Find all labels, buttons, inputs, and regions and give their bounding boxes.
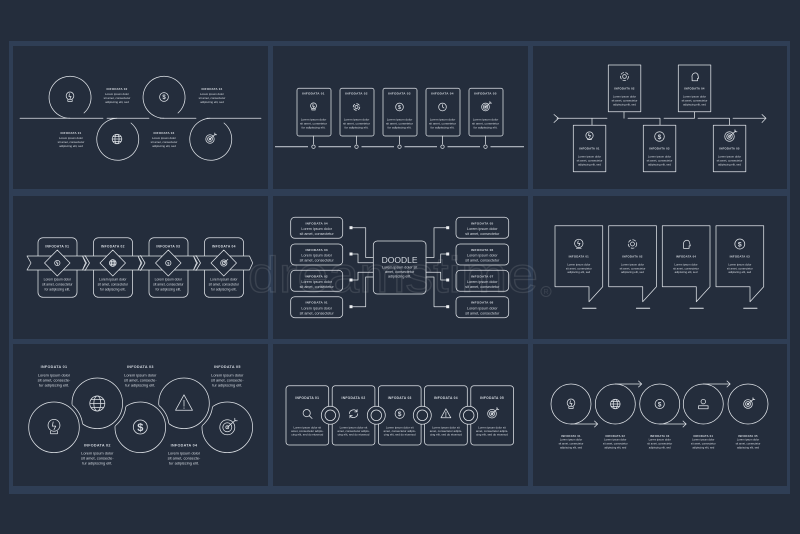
- bubble labels: sit amet, consectetur: [673, 266, 699, 270]
- side box labels: Lorem ipsum dolor: [301, 280, 333, 284]
- diamond icons: $: [167, 261, 170, 265]
- side box labels: Lorem ipsum dolor: [301, 306, 333, 310]
- rounded cards: [38, 238, 244, 297]
- ribbon labels: for adipiscing elit,: [45, 288, 70, 292]
- panel: ribbon and diamonds: [27, 238, 253, 297]
- linked card labels: INFODATA 02: [342, 396, 365, 400]
- spiral labels: adipiscing elit, sed: [200, 100, 224, 104]
- card labels: sit amet, consetetur: [386, 122, 413, 126]
- spiral labels: sit amet, consectetur: [104, 96, 130, 100]
- side box labels: sit amet, consectetur: [300, 232, 334, 236]
- bubble labels: adipiscing elit, sed: [567, 270, 591, 274]
- ring labels: INFODATA 01: [41, 365, 67, 369]
- circle labels: adipiscing elit, sed: [604, 446, 627, 450]
- box labels: sit amet, consectetur: [682, 98, 707, 102]
- bubble labels: adipiscing elit, sed: [728, 270, 752, 274]
- card labels: for adipiscing elit.: [345, 126, 369, 130]
- spiral labels: INFODATA 03: [154, 131, 175, 135]
- spiral labels: INFODATA 01: [61, 131, 82, 135]
- card labels: INFODATA 05: [474, 92, 497, 96]
- side box labels: INFODATA 07: [471, 274, 494, 278]
- spiral labels: Lorem ipsum dolor: [105, 92, 129, 96]
- ribbon labels: sit amet, consectetur: [42, 282, 73, 286]
- ring labels: sit amet, consecte-: [211, 378, 244, 382]
- bubbles: [555, 226, 764, 308]
- spiral icons: [66, 92, 217, 144]
- arrow line with chevrons: [554, 112, 766, 125]
- linked card labels: [291, 396, 508, 437]
- card labels: [300, 92, 499, 130]
- ribbon labels: Lorem ipsum dolor: [210, 278, 238, 282]
- ring labels: Lorem ipsum dolor: [124, 372, 157, 378]
- ring labels: Lorem ipsum dolor: [168, 450, 201, 456]
- circle labels: sit amet, consectetur: [647, 442, 672, 446]
- linked card labels: Lorem ipsum dolor sit: [432, 426, 460, 430]
- linked card labels: Lorem ipsum dolor sit: [478, 426, 506, 430]
- circle icons: [567, 398, 755, 409]
- ring icons: $: [137, 422, 143, 434]
- side box labels: Lorem ipsum dolor: [467, 254, 498, 258]
- card labels: INFODATA 01: [302, 92, 325, 96]
- ring labels: tur adipiscing elit.: [125, 382, 155, 388]
- circle labels: [559, 434, 761, 450]
- ribbon labels: INFODATA 04: [212, 244, 236, 248]
- box labels: INFODATA 05: [719, 146, 740, 150]
- circle labels: adipiscing elit, sed: [737, 446, 759, 450]
- ring labels: Lorem ipsum dolor: [211, 372, 244, 378]
- side box labels: INFODATA 01: [305, 300, 328, 304]
- spiral icons: $: [162, 95, 166, 101]
- linked card labels: Lorem ipsum dolor sit: [386, 426, 414, 430]
- bubble labels: Lorem ipsum dolor: [728, 262, 751, 266]
- bubble labels: Lorem ipsum dolor: [567, 262, 590, 266]
- ring labels: INFODATA 05: [214, 365, 241, 369]
- side box labels: sit amet, consectetur: [465, 312, 500, 316]
- side box labels: sit amet, consectetur: [300, 285, 334, 289]
- panel backgrounds: [13, 46, 787, 486]
- panel: interlocking circles: [25, 365, 253, 466]
- circle labels: sit amet, consectetur: [691, 442, 716, 446]
- linked cards: [286, 386, 514, 445]
- ribbon labels: Lorem ipsum dolor: [99, 278, 127, 282]
- box labels: adipiscing elit, sed: [578, 162, 601, 166]
- side box labels: sit amet, consectetur: [300, 312, 334, 316]
- box labels: Lorem ipsum dolor: [613, 94, 636, 98]
- circle labels: sit amet, consectetur: [603, 442, 628, 446]
- card labels: sit amet, consetetur: [472, 122, 499, 126]
- cards and stems: [297, 88, 503, 148]
- side box labels: sit amet, consectetur: [465, 285, 500, 289]
- bubble labels: Lorem ipsum dolor: [621, 262, 644, 266]
- bubble labels: Lorem ipsum dolor: [674, 262, 698, 266]
- card labels: for adipiscing elit.: [431, 126, 455, 130]
- circle labels: sit amet, consectetur: [736, 442, 761, 446]
- spiral labels: adipiscing elit, sed: [105, 100, 129, 104]
- ring labels: sit amet, consecte-: [124, 378, 157, 382]
- hub text: adipiscing elit.: [388, 274, 411, 278]
- side box labels: Lorem ipsum dolor: [467, 280, 498, 284]
- side box labels: [300, 222, 500, 316]
- linked card labels: amet, consectetur adipis-: [337, 429, 370, 433]
- side boxes and hub: [291, 217, 509, 318]
- ribbon labels: Lorem ipsum dolor: [155, 278, 183, 282]
- circle labels: Lorem ipsum dolor: [737, 438, 759, 442]
- boxes: [573, 65, 746, 172]
- ribbon labels: for adipiscing elit,: [156, 288, 181, 292]
- ring labels: tur adipiscing elit.: [212, 382, 242, 388]
- ribbon labels: INFODATA 03: [156, 244, 180, 248]
- side box labels: Lorem ipsum dolor: [467, 227, 498, 231]
- ring labels: Lorem ipsum dolor: [38, 372, 71, 378]
- side box labels: sit amet, consectetur: [300, 258, 334, 262]
- side box labels: INFODATA 05: [471, 222, 494, 226]
- box labels: sit amet, consectetur: [647, 158, 672, 162]
- ribbon labels: sit amet, consectetur: [98, 282, 129, 286]
- side box labels: INFODATA 08: [471, 300, 494, 304]
- ribbon labels: INFODATA 01: [45, 244, 69, 248]
- linked card labels: amet, consectetur adipis-: [430, 429, 462, 433]
- linked card labels: amet, consectetur adipis-: [476, 429, 508, 433]
- card labels: for adipiscing elit.: [388, 126, 412, 130]
- circle labels: Lorem ipsum dolor: [649, 438, 671, 442]
- panel: five cards on a line: [275, 88, 524, 148]
- spiral line and arcs: [20, 76, 261, 160]
- linked card labels: amet, consectetur adipis-: [291, 429, 323, 433]
- card labels: Lorem ipsum dolor: [301, 118, 326, 122]
- watermark: R: [543, 289, 549, 296]
- panel: spiral circles timeline: [20, 76, 261, 160]
- bubble labels: INFODATA 03: [730, 254, 750, 258]
- linked card labels: INFODATA 03: [388, 396, 412, 400]
- box labels: sit amet, consectetur: [717, 158, 742, 162]
- connectors: [351, 228, 448, 307]
- bubble labels: INFODATA 01: [569, 254, 589, 258]
- ring labels: INFODATA 02: [84, 444, 111, 448]
- spiral labels: Lorem ipsum dolor: [59, 136, 83, 140]
- card labels: INFODATA 04: [431, 92, 454, 96]
- box labels: Lorem ipsum dolor: [578, 154, 601, 158]
- linked card icons: [303, 408, 499, 418]
- ribbon labels: sit amet, consectetur: [153, 282, 184, 286]
- bubble icons: [575, 239, 745, 249]
- circle labels: Lorem ipsum dolor: [604, 438, 627, 442]
- spiral labels: sit amet, consectetur: [151, 140, 177, 144]
- bubble labels: sit amet, consectetur: [620, 266, 645, 270]
- circle labels: INFODATA 02: [606, 434, 625, 438]
- card labels: INFODATA 03: [388, 92, 411, 96]
- side box labels: sit amet, consectetur: [465, 258, 500, 262]
- ribbon labels: for adipiscing elit,: [100, 288, 126, 292]
- ring labels: sit amet, consecte-: [38, 378, 71, 382]
- box labels: adipiscing elit, sed: [683, 102, 706, 106]
- linked card icons: $: [398, 411, 402, 418]
- linked card labels: Lorem ipsum dolor sit: [340, 426, 368, 430]
- circle labels: adipiscing elit, sed: [560, 446, 582, 450]
- linked card labels: cing elit, sed do eiusmod: [476, 433, 508, 437]
- circle labels: INFODATA 01: [561, 434, 581, 438]
- box labels: Lorem ipsum dolor: [648, 154, 671, 158]
- side box labels: INFODATA 06: [471, 248, 494, 252]
- diamonds: [44, 250, 236, 276]
- bubble labels: adipiscing elit, sed: [621, 270, 644, 274]
- box labels: Lorem ipsum dolor: [718, 154, 741, 158]
- panel: speech bubble boxes: [555, 226, 764, 308]
- panel: linked cards with rings: [286, 386, 514, 445]
- ring labels: tur adipiscing elit.: [39, 382, 69, 388]
- ribbon labels: [42, 244, 240, 292]
- card labels: Lorem ipsum dolor: [387, 118, 412, 122]
- hub text: amet, consectetur: [385, 270, 415, 274]
- hub text: [382, 255, 418, 278]
- side box labels: Lorem ipsum dolor: [301, 227, 333, 231]
- card icons: $: [398, 105, 401, 111]
- spiral labels: INFODATA 04: [202, 87, 223, 91]
- circle labels: Lorem ipsum dolor: [692, 438, 715, 442]
- box labels: Lorem ipsum dolor: [683, 94, 706, 98]
- circle labels: INFODATA 04: [694, 434, 713, 438]
- spiral labels: INFODATA 02: [107, 87, 128, 91]
- watermark: dreamstime: [248, 247, 538, 303]
- card labels: sit amet, consetetur: [429, 122, 456, 126]
- side box labels: INFODATA 03: [305, 248, 328, 252]
- interlocking rings: [25, 375, 253, 456]
- spiral labels: sit amet, consectetur: [58, 140, 84, 144]
- panel: branching arrow timeline: [554, 65, 766, 172]
- linked card labels: Lorem ipsum dolor sit: [293, 426, 321, 430]
- side box labels: Lorem ipsum dolor: [467, 306, 498, 310]
- spiral labels: Lorem ipsum dolor: [152, 136, 176, 140]
- diamond icons: [55, 259, 228, 266]
- spiral labels: adipiscing elit, sed: [59, 144, 83, 148]
- card labels: Lorem ipsum dolor: [430, 118, 455, 122]
- linked card labels: cing elit, sed do eiusmod: [291, 433, 324, 437]
- circles and arrows: [551, 381, 768, 427]
- ribbon labels: Lorem ipsum dolor: [44, 278, 72, 282]
- spiral labels: sit amet, consectetur: [199, 96, 225, 100]
- linked card labels: cing elit, sed do eiusmod: [430, 433, 462, 437]
- linked card labels: INFODATA 04: [434, 396, 458, 400]
- side box labels: sit amet, consectetur: [465, 232, 500, 236]
- hub text: DOODLE: [382, 255, 418, 265]
- box labels: INFODATA 03: [649, 146, 670, 150]
- spiral labels: adipiscing elit, sed: [152, 144, 176, 148]
- card labels: Lorem ipsum dolor: [473, 118, 498, 122]
- circle labels: Lorem ipsum dolor: [560, 438, 582, 442]
- box labels: INFODATA 02: [614, 86, 635, 90]
- linked card labels: INFODATA 05: [480, 396, 504, 400]
- bubble icons: $: [738, 241, 742, 248]
- box labels: INFODATA 04: [684, 86, 705, 90]
- box labels: sit amet, consectetur: [612, 98, 637, 102]
- bubble labels: adipiscing elit, sed: [675, 270, 698, 274]
- bubble labels: sit amet, consectetur: [727, 266, 753, 270]
- side box labels: INFODATA 02: [305, 274, 328, 278]
- circle labels: INFODATA 03: [650, 434, 670, 438]
- linked card labels: INFODATA 01: [295, 396, 319, 400]
- box icons: [586, 72, 737, 141]
- ribbon labels: for adipiscing elit,: [211, 288, 237, 292]
- bubble labels: INFODATA 04: [676, 254, 696, 258]
- panel: central doodle hub: [291, 217, 509, 318]
- ring labels: [38, 365, 244, 466]
- connector dots: [350, 226, 449, 308]
- ring icons: [48, 395, 237, 435]
- box labels: adipiscing elit, sed: [648, 162, 671, 166]
- ribbon labels: sit amet, consectetur: [209, 282, 240, 286]
- card labels: for adipiscing elit.: [302, 126, 326, 130]
- bubble labels: INFODATA 02: [622, 254, 643, 258]
- spiral labels: [58, 87, 225, 148]
- circle labels: adipiscing elit, sed: [692, 446, 715, 450]
- base line: [275, 146, 524, 148]
- box labels: [577, 86, 742, 166]
- ribbon chevrons: [85, 256, 200, 270]
- box icons: $: [658, 134, 662, 141]
- card labels: for adipiscing elit.: [474, 126, 498, 130]
- box labels: adipiscing elit, sed: [613, 102, 636, 106]
- panel: circles with arrows: [551, 381, 768, 450]
- circle labels: adipiscing elit, sed: [649, 446, 671, 450]
- card labels: sit amet, consetetur: [343, 122, 370, 126]
- ring labels: tur adipiscing elit.: [169, 460, 199, 466]
- ring labels: sit amet, consecte-: [81, 456, 114, 460]
- linked card labels: cing elit, sed do eiusmod: [384, 433, 416, 437]
- ring labels: sit amet, consecte-: [168, 456, 201, 460]
- ring labels: tur adipiscing elit.: [82, 460, 112, 466]
- bubble labels: sit amet, consectetur: [566, 266, 592, 270]
- ring labels: INFODATA 04: [171, 444, 198, 448]
- box labels: sit amet, consectetur: [577, 158, 602, 162]
- linking rings: [321, 406, 478, 424]
- card labels: INFODATA 02: [345, 92, 368, 96]
- circle labels: INFODATA 05: [738, 434, 758, 438]
- hub text: Lorem ipsum dolor sit: [382, 266, 417, 270]
- ribbon labels: INFODATA 02: [101, 244, 125, 248]
- linked card labels: amet, consectetur adipis-: [384, 429, 416, 433]
- side box labels: Lorem ipsum dolor: [301, 254, 333, 258]
- bubble labels: [566, 254, 753, 274]
- card labels: sit amet, consetetur: [300, 122, 327, 126]
- box labels: INFODATA 01: [579, 146, 600, 150]
- linked card labels: cing elit, sed do eiusmod: [338, 433, 370, 437]
- side box labels: INFODATA 04: [305, 222, 328, 226]
- circle labels: sit amet, consectetur: [559, 442, 584, 446]
- card labels: Lorem ipsum dolor: [344, 118, 369, 122]
- circle icons: $: [658, 401, 662, 408]
- ribbon segments: [27, 256, 253, 270]
- card icons: [311, 102, 492, 111]
- spiral labels: Lorem ipsum dolor: [200, 92, 224, 96]
- box labels: adipiscing elit, sed: [718, 162, 741, 166]
- ring labels: Lorem ipsum dolor: [81, 450, 114, 456]
- ring labels: INFODATA 03: [127, 365, 154, 369]
